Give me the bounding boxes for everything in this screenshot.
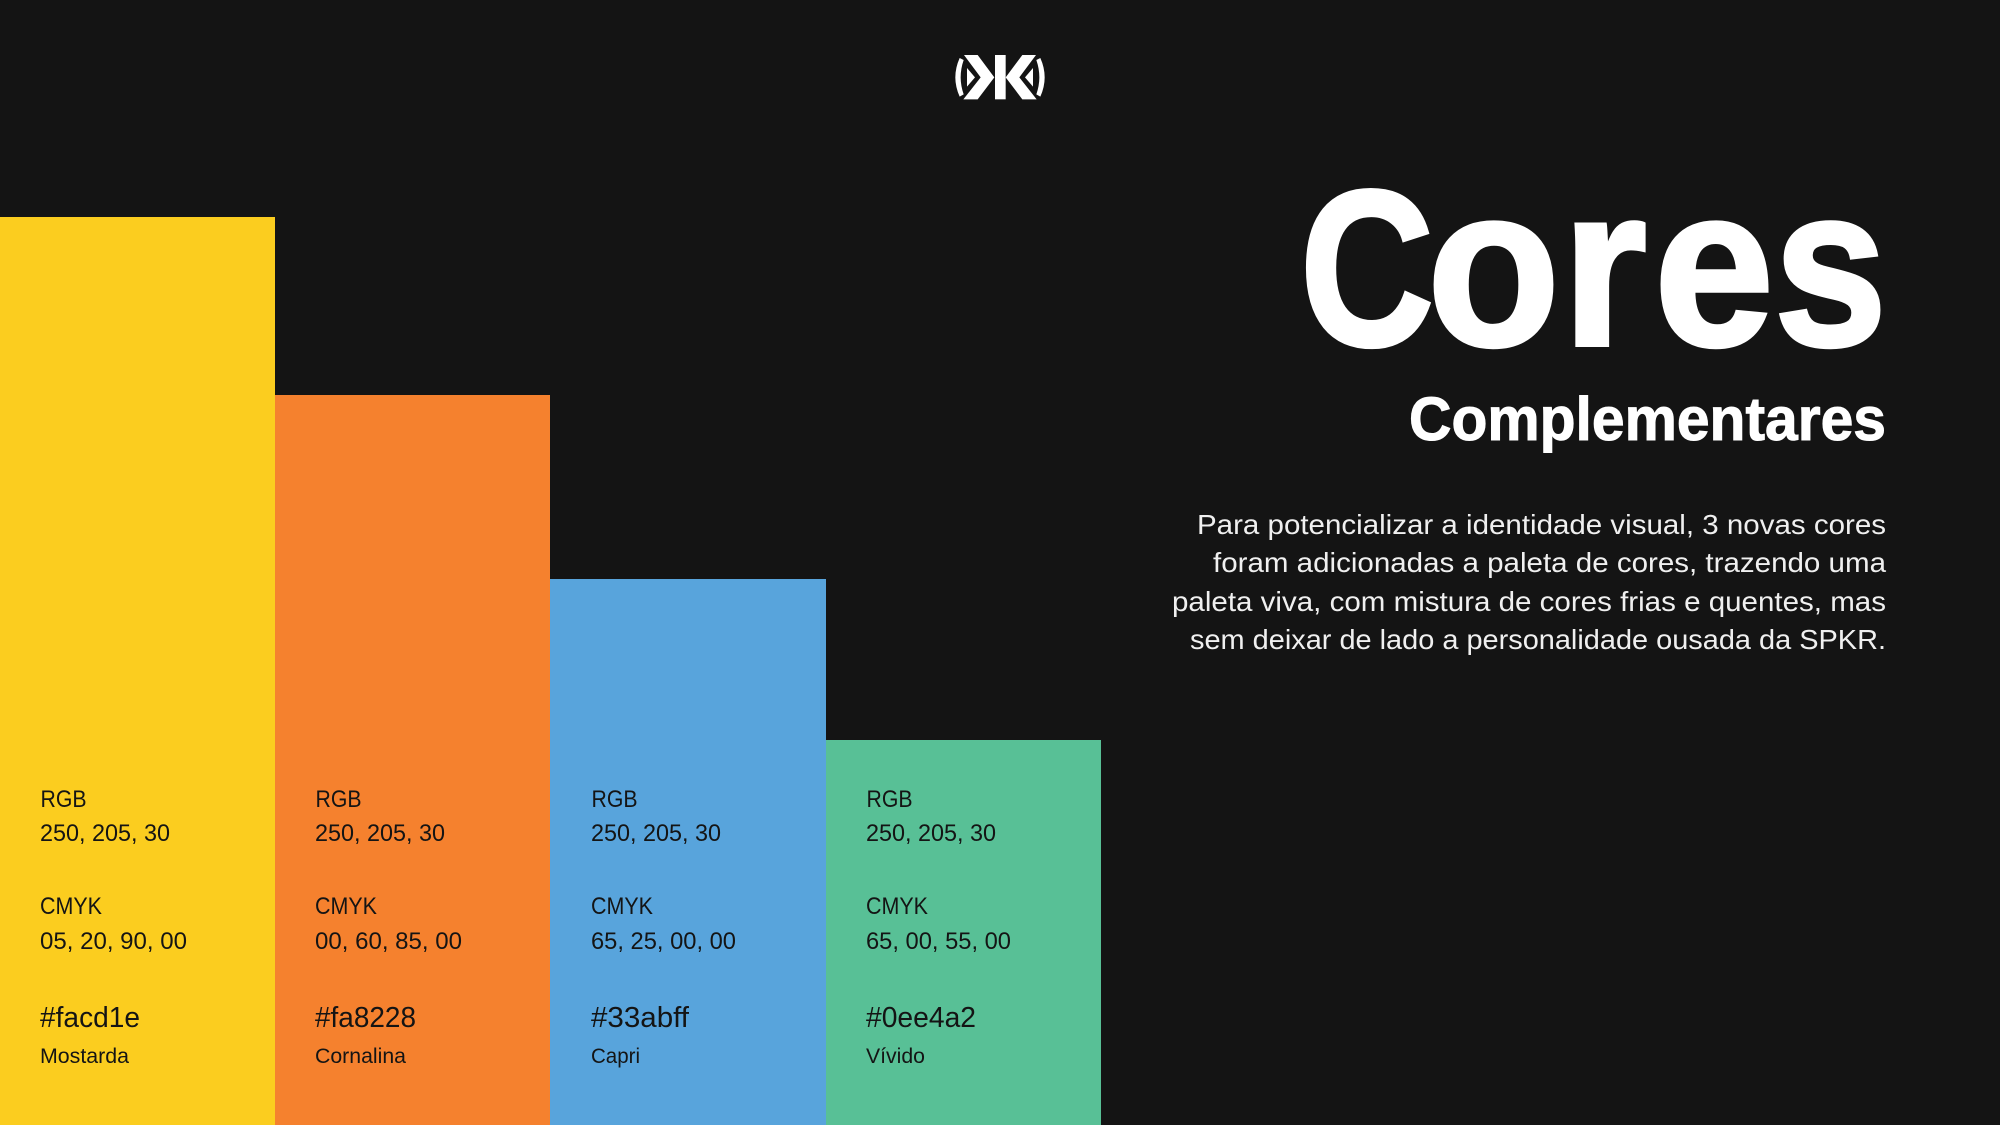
text block: description: Para potencializar a identidade visual, 3 novas cores [1197, 509, 1886, 540]
panel: Vívido: 250, 205, 30 [866, 820, 996, 847]
panel: Vívido: RGB [866, 786, 912, 813]
text block: description: foram adicionadas a paleta de cores, trazendo uma [1213, 547, 1886, 578]
subtitle: Complementares: Complementares [1409, 385, 1886, 453]
icon: SPKR logo [955, 55, 1045, 99]
title: Cores: o [1427, 140, 1560, 394]
panel: Vívido [826, 740, 1101, 1125]
panel: Cornalina: Cornalina [315, 1045, 406, 1068]
title: Cores: r [1562, 140, 1647, 394]
panel: Cornalina: 250, 205, 30 [315, 820, 445, 847]
text block: description: sem deixar de lado a personalidade ousada da SPKR. [1190, 624, 1886, 655]
title: Cores: s [1774, 140, 1887, 394]
panel: Capri [550, 579, 826, 1125]
panel: Mostarda [0, 217, 275, 1125]
panel: Vívido: CMYK [866, 893, 928, 920]
panel: Capri: RGB [592, 786, 638, 813]
text block: description: paleta viva, com mistura de cores frias e quentes, mas [1172, 586, 1886, 617]
panel: Capri: CMYK [591, 893, 653, 920]
panel: Mostarda: Mostarda [40, 1045, 129, 1068]
panel: Mostarda: 250, 205, 30 [40, 820, 170, 847]
panel: Mostarda: RGB [40, 786, 86, 813]
panel: Capri: #33abff [591, 1002, 690, 1034]
title: Cores: e [1654, 140, 1774, 394]
panel: Capri: 65, 25, 00, 00 [591, 928, 736, 955]
panel: Cornalina: CMYK [315, 893, 377, 920]
panel: Vívido: 65, 00, 55, 00 [866, 928, 1011, 955]
title: Cores [1300, 140, 1887, 394]
panel: Capri: 250, 205, 30 [591, 820, 721, 847]
panel: Cornalina: 00, 60, 85, 00 [315, 928, 462, 955]
panel: Mostarda: 05, 20, 90, 00 [40, 928, 187, 955]
panel: Cornalina [275, 395, 550, 1125]
panel: Cornalina: #fa8228 [315, 1002, 416, 1034]
panel: Vívido: #0ee4a2 [866, 1002, 976, 1034]
panel: Mostarda: CMYK [40, 893, 102, 920]
text block: description [1172, 509, 1886, 655]
panel: Mostarda: #facd1e [40, 1002, 140, 1034]
panel: Cornalina: RGB [316, 786, 362, 813]
panel: Capri: Capri [591, 1045, 640, 1068]
title: Cores: C [1300, 145, 1434, 393]
panel: Vívido: Vívido [866, 1045, 925, 1068]
